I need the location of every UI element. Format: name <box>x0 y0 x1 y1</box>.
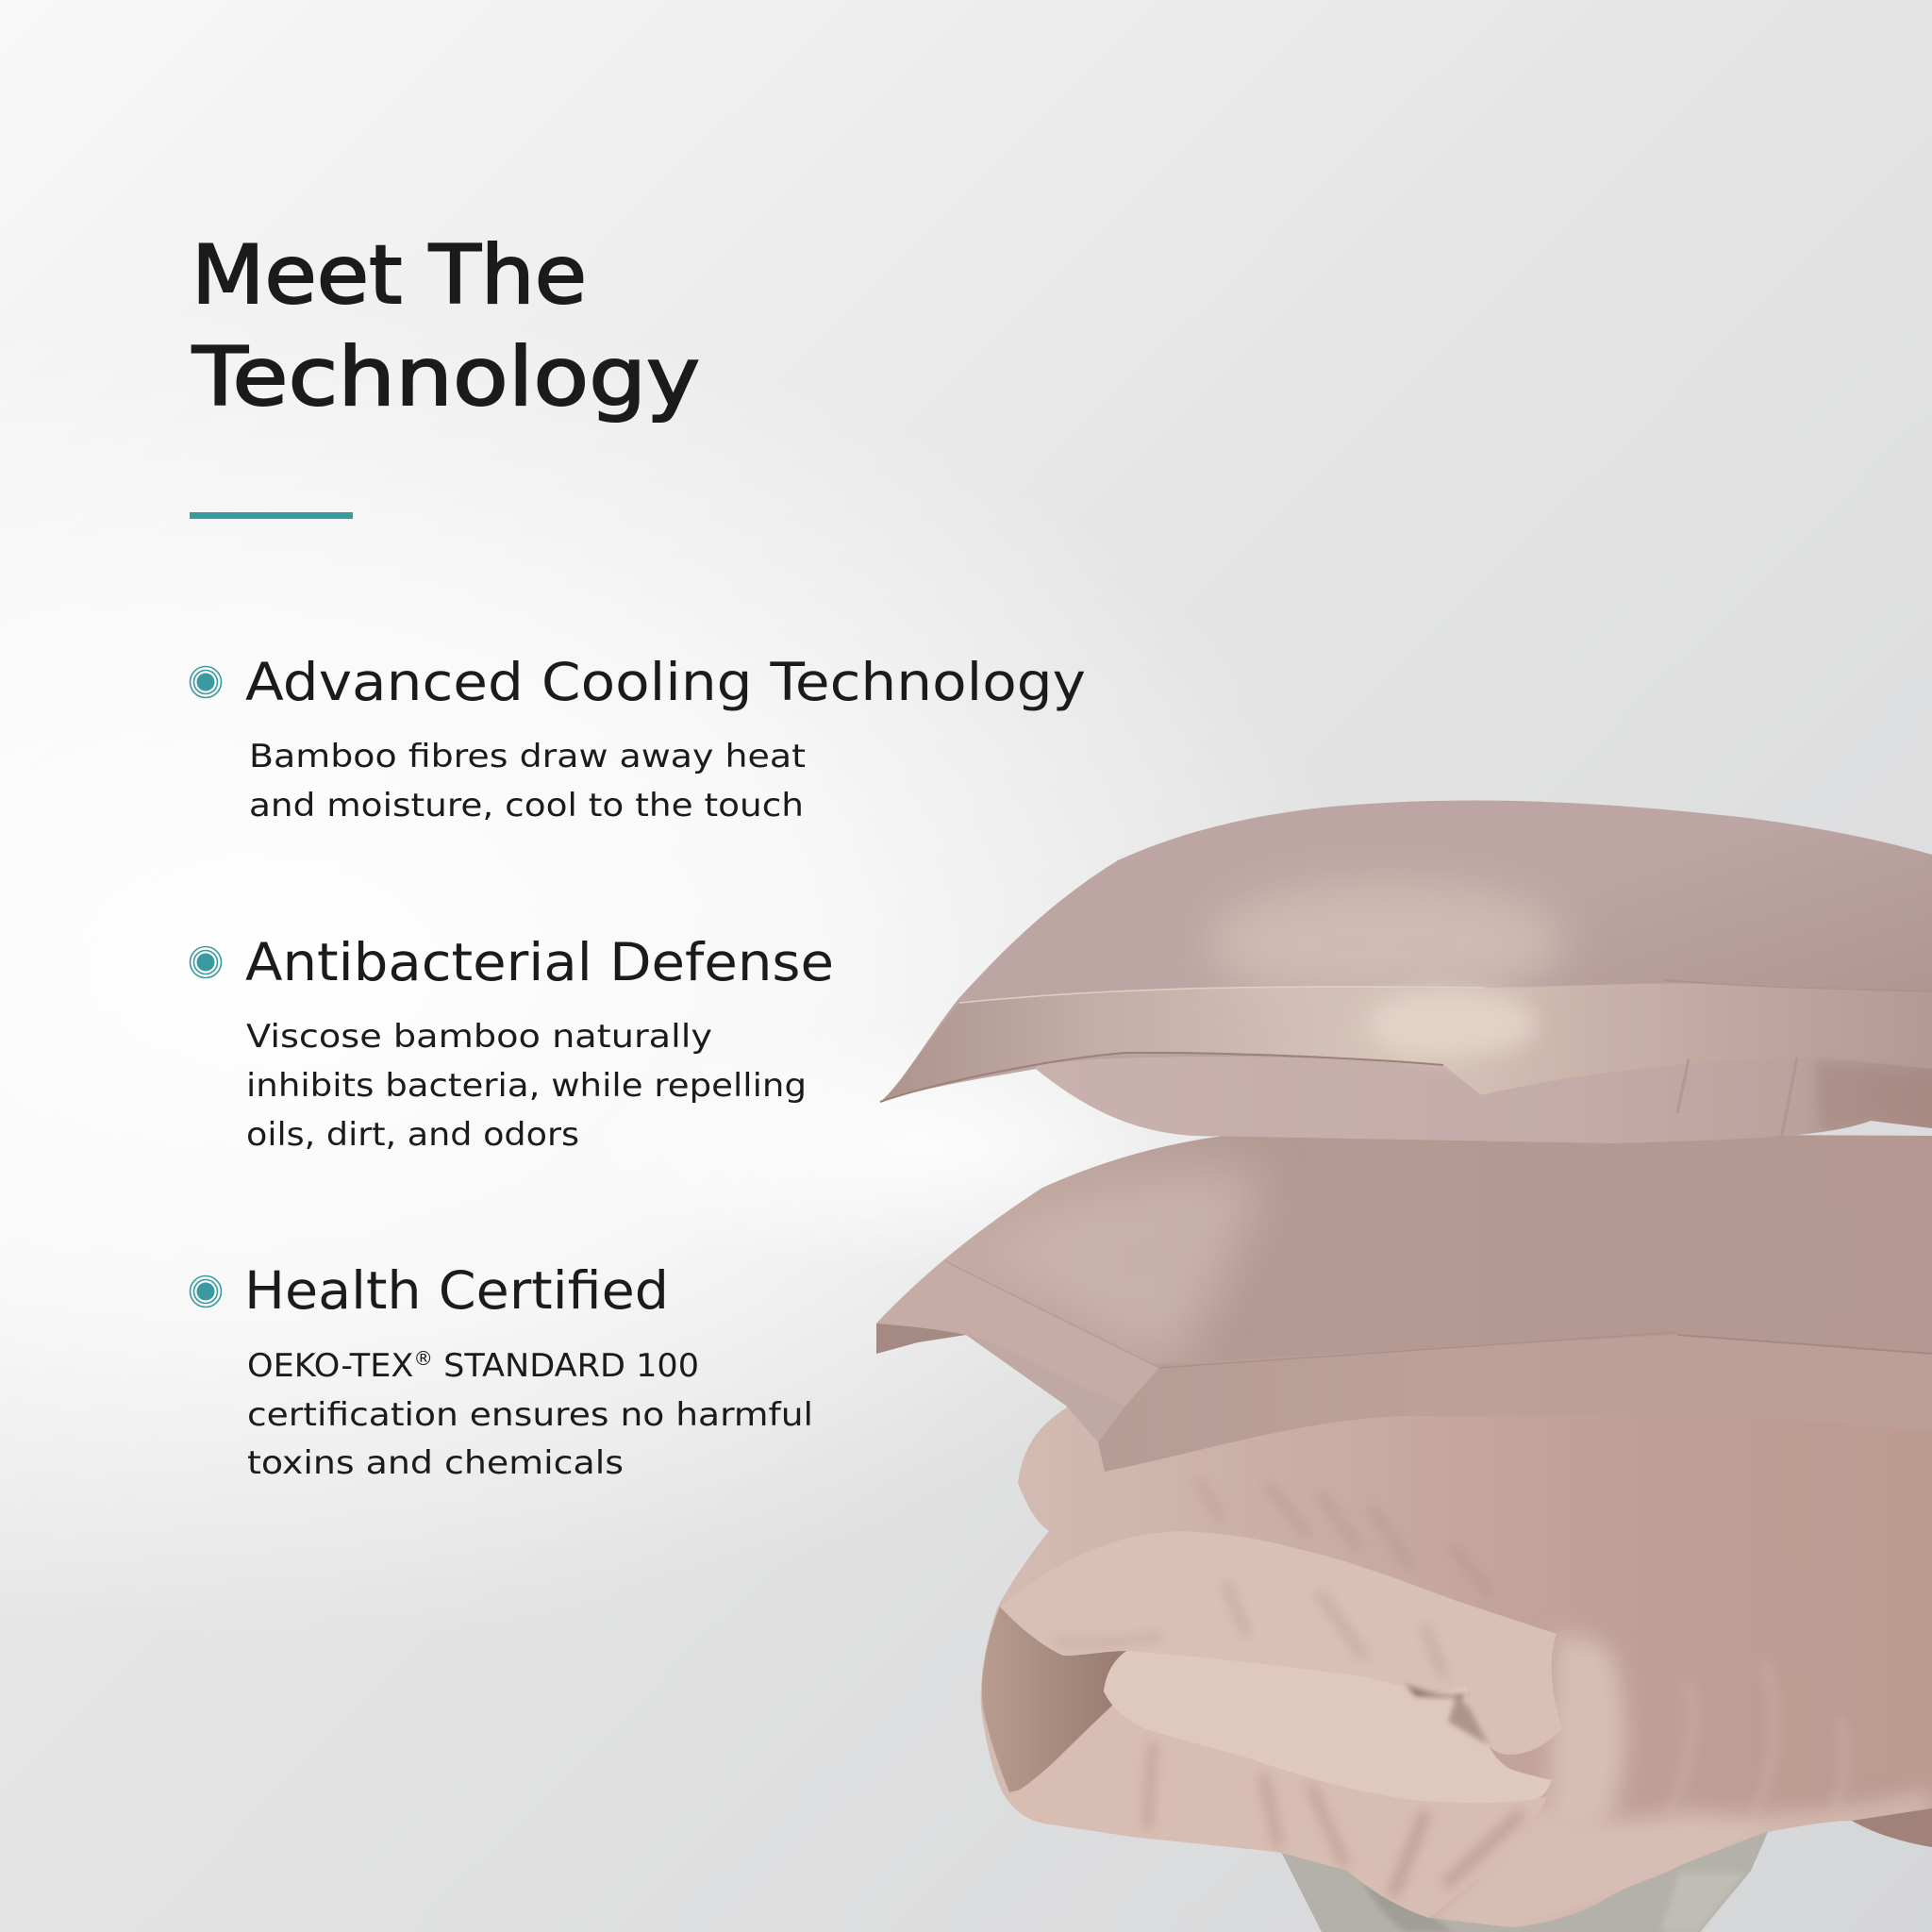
feature: Antibacterial Defense <box>191 932 834 1154</box>
title <box>192 228 700 425</box>
description: toxins and chemicals <box>247 1444 624 1482</box>
title: Meet The <box>192 228 587 323</box>
left flap <box>876 1309 1158 1406</box>
lower front panel <box>1099 1337 1674 1472</box>
product image: stacked bedding <box>876 801 1932 1932</box>
upper pillow <box>880 801 1932 1143</box>
description <box>249 738 806 824</box>
folded duvet <box>981 1406 1932 1932</box>
description: Viscose bamboo naturally <box>246 1018 712 1056</box>
front flap <box>880 983 1932 1102</box>
hanging fold <box>1852 1808 1932 1847</box>
heading: Health Certified <box>244 1260 669 1321</box>
heading: Advanced Cooling Technology <box>245 652 1086 712</box>
description: STANDARD 100 <box>433 1347 699 1385</box>
description: oils, dirt, and odors <box>246 1116 579 1154</box>
description <box>247 1347 813 1482</box>
description: and moisture, cool to the touch <box>249 787 804 824</box>
lower right flap <box>1415 1792 1932 1932</box>
description: certification ensures no harmful <box>247 1396 813 1434</box>
short rear wrinkles <box>1198 1481 1491 1594</box>
left shadowed side <box>982 1607 1126 1792</box>
lower roll layer <box>1007 1705 1547 1918</box>
lower pillow <box>876 1132 1932 1474</box>
icon: teal bullet <box>191 947 221 977</box>
inner roll <box>1104 1651 1552 1803</box>
title: Technology <box>192 330 700 425</box>
feature: Health Certified <box>191 1260 813 1482</box>
description <box>246 1018 807 1154</box>
description: ® <box>413 1347 433 1370</box>
stone pedestal <box>1277 1821 1769 1932</box>
description: OEKO-TEX <box>247 1347 408 1385</box>
feature: Advanced Cooling Technology <box>191 652 1086 824</box>
description: Bamboo fibres draw away heat <box>249 738 806 775</box>
teal divider <box>190 512 353 519</box>
under pillow <box>1036 1057 1932 1143</box>
description: inhibits bacteria, while repelling <box>246 1067 807 1105</box>
icon: teal bullet <box>191 1275 221 1307</box>
wrinkles on the main face <box>1670 1660 1844 1816</box>
upper roll layer <box>1000 1531 1562 1755</box>
icon: teal bullet <box>191 666 221 698</box>
soft highlights <box>1208 882 1566 1005</box>
heading: Antibacterial Defense <box>245 932 834 992</box>
